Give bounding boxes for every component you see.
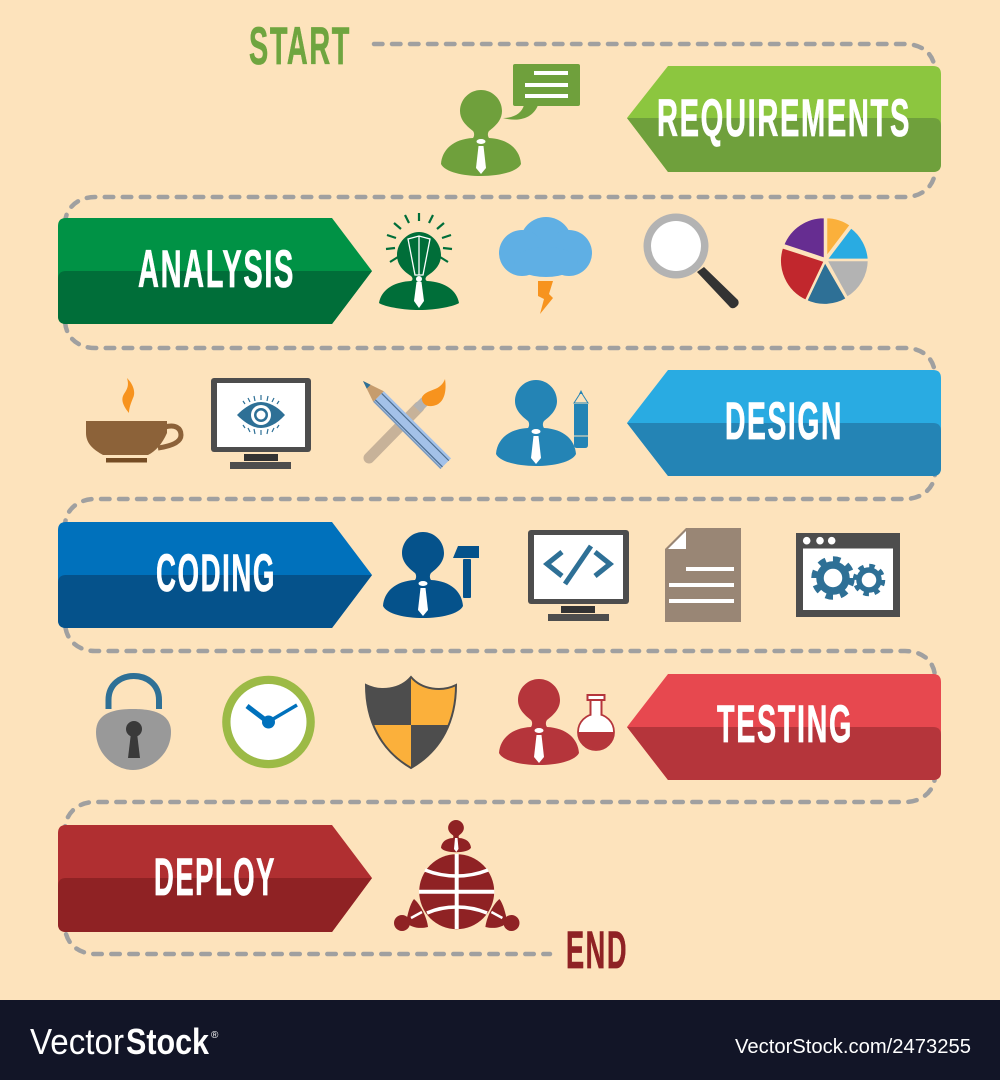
banner: coding: CODING: [156, 544, 276, 603]
footer bar: VectorStock.com/2473255: [735, 1036, 971, 1058]
icon: person with speech bubble: [441, 64, 580, 176]
icon: person with flask: [499, 679, 615, 765]
banner: requirements: [627, 66, 941, 172]
banner: design: [627, 370, 941, 476]
icon: coffee cup: [86, 378, 181, 462]
icon: clock: [222, 676, 315, 768]
icon: shield: [365, 676, 457, 770]
icon: globe with three people: [394, 820, 520, 931]
footer bar: ®: [211, 1030, 219, 1041]
icon: document: [665, 528, 741, 622]
footer bar: Vector: [30, 1021, 124, 1062]
heading: END: END: [566, 921, 628, 980]
footer bar: Stock: [126, 1021, 210, 1062]
icon: monitor with eye: [211, 378, 311, 469]
icon: magnifying glass: [644, 214, 739, 308]
banner: analysis: ANALYSIS: [138, 240, 295, 299]
banner: testing: TESTING: [717, 695, 853, 754]
icon: person with light bulb head: [379, 213, 459, 310]
icon: person with pencil: [496, 380, 588, 466]
footer bar: [0, 1000, 1000, 1080]
banner: coding: [58, 522, 372, 628]
icon: person with hammer: [383, 532, 479, 618]
icon: crossed pencil and brush: [358, 376, 451, 469]
icon: browser window with gears: [796, 533, 900, 617]
banner: design: DESIGN: [725, 392, 843, 451]
heading: START: START: [249, 17, 351, 76]
icon: pie chart: [780, 217, 869, 305]
banner: analysis: [58, 218, 372, 324]
banner: deploy: [58, 825, 372, 932]
icon: padlock: [96, 676, 171, 770]
banner: testing: [627, 674, 941, 780]
banner: deploy: DEPLOY: [154, 848, 276, 907]
icon: monitor with code: [528, 530, 629, 621]
dashed process path: [65, 44, 935, 954]
icon: cloud with lightning: [499, 217, 592, 314]
